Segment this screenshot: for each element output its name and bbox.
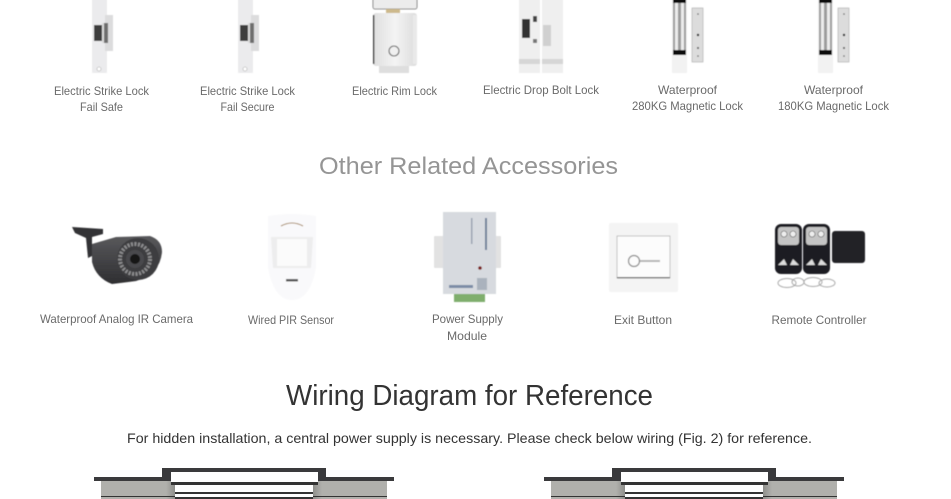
wiring diagram: right door frame: [544, 468, 844, 499]
accessory: waterproof analog IR camera: Waterproof Analog IR Camera: [40, 312, 193, 326]
accessory: power supply module: Power Supply: [432, 312, 503, 326]
product: electric rim lock: Electric Rim Lock: [352, 84, 438, 98]
product: electric rim lock: [352, 0, 438, 98]
accessory: remote controller: [772, 224, 866, 327]
product: waterproof 180KG magnetic lock: Waterproof: [804, 83, 864, 97]
product: waterproof 180KG magnetic lock: [778, 0, 890, 113]
product: electric strike lock fail secure: [200, 0, 296, 114]
heading: wiring diagram for reference: Wiring Diagram for Reference: [286, 380, 653, 412]
accessory: exit button: [609, 223, 678, 327]
product: electric drop bolt lock: Electric Drop Bolt Lock: [483, 83, 600, 97]
product: electric strike lock fail secure: Electric Strike Lock: [200, 84, 296, 98]
wiring diagram: left door frame: [94, 468, 394, 499]
accessory: waterproof analog IR camera: [40, 227, 193, 326]
accessory: power supply module: [432, 212, 503, 343]
accessory: power supply module: Module: [447, 329, 487, 343]
product: electric drop bolt lock: [483, 0, 600, 97]
product: electric strike lock fail secure: Fail Secure: [220, 100, 275, 114]
product: waterproof 180KG magnetic lock: 180KG Magnetic Lock: [778, 99, 890, 113]
accessory: wired PIR sensor: [248, 214, 334, 327]
product: electric strike lock fail safe: Electric Strike Lock: [54, 84, 150, 98]
product: waterproof 280KG magnetic lock: Waterproof: [658, 83, 718, 97]
product: waterproof 280KG magnetic lock: [632, 0, 744, 113]
text: hidden installation note: For hidden installation, a central power supply is necessary. Please check below wiring (Fig. 2) for reference.: [127, 430, 812, 446]
product: waterproof 280KG magnetic lock: 280KG Magnetic Lock: [632, 99, 744, 113]
product: electric strike lock fail safe: [54, 0, 150, 114]
product: electric strike lock fail safe: Fail Safe: [80, 100, 123, 114]
accessory: exit button: Exit Button: [614, 313, 672, 327]
accessory: wired PIR sensor: Wired PIR Sensor: [248, 313, 334, 327]
heading: other related accessories: Other Related Accessories: [319, 153, 618, 180]
accessory: remote controller: Remote Controller: [772, 313, 866, 327]
